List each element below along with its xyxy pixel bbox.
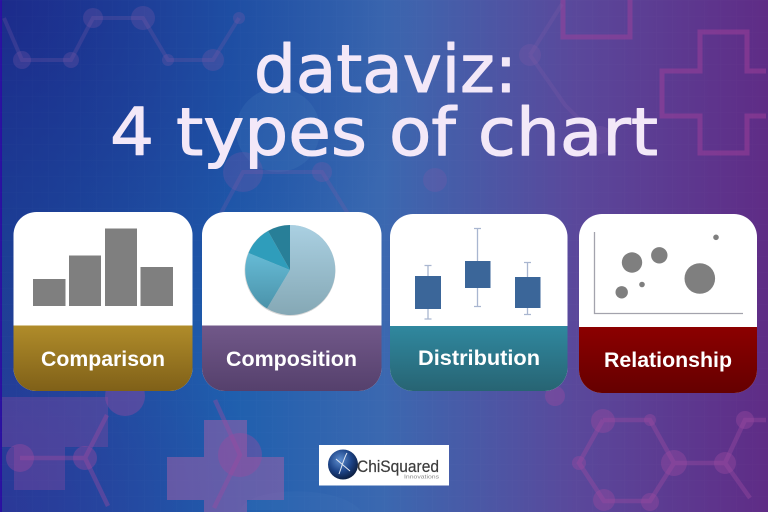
label: distribution: Distribution [418, 347, 540, 370]
label: comparison: Comparison [41, 348, 165, 371]
panel: composition [202, 212, 382, 392]
pie chart [244, 225, 336, 316]
bar chart [33, 228, 173, 306]
title: 4 types of chart [110, 94, 658, 171]
panel: comparison [14, 212, 192, 392]
panel: distribution [390, 214, 568, 391]
panel: relationship [579, 214, 757, 393]
scatter plot [594, 232, 743, 314]
label: composition: Composition [226, 348, 357, 371]
box plot [415, 228, 540, 319]
logo: ChiSquared Innovations: Innovations [404, 474, 439, 480]
title: dataviz: [254, 31, 517, 108]
label: relationship: Relationship [604, 349, 732, 372]
logo: ChiSquared Innovations [319, 445, 449, 486]
icon: globe [328, 450, 358, 480]
logo: ChiSquared Innovations: ChiSquared [357, 458, 439, 476]
title [110, 31, 658, 171]
